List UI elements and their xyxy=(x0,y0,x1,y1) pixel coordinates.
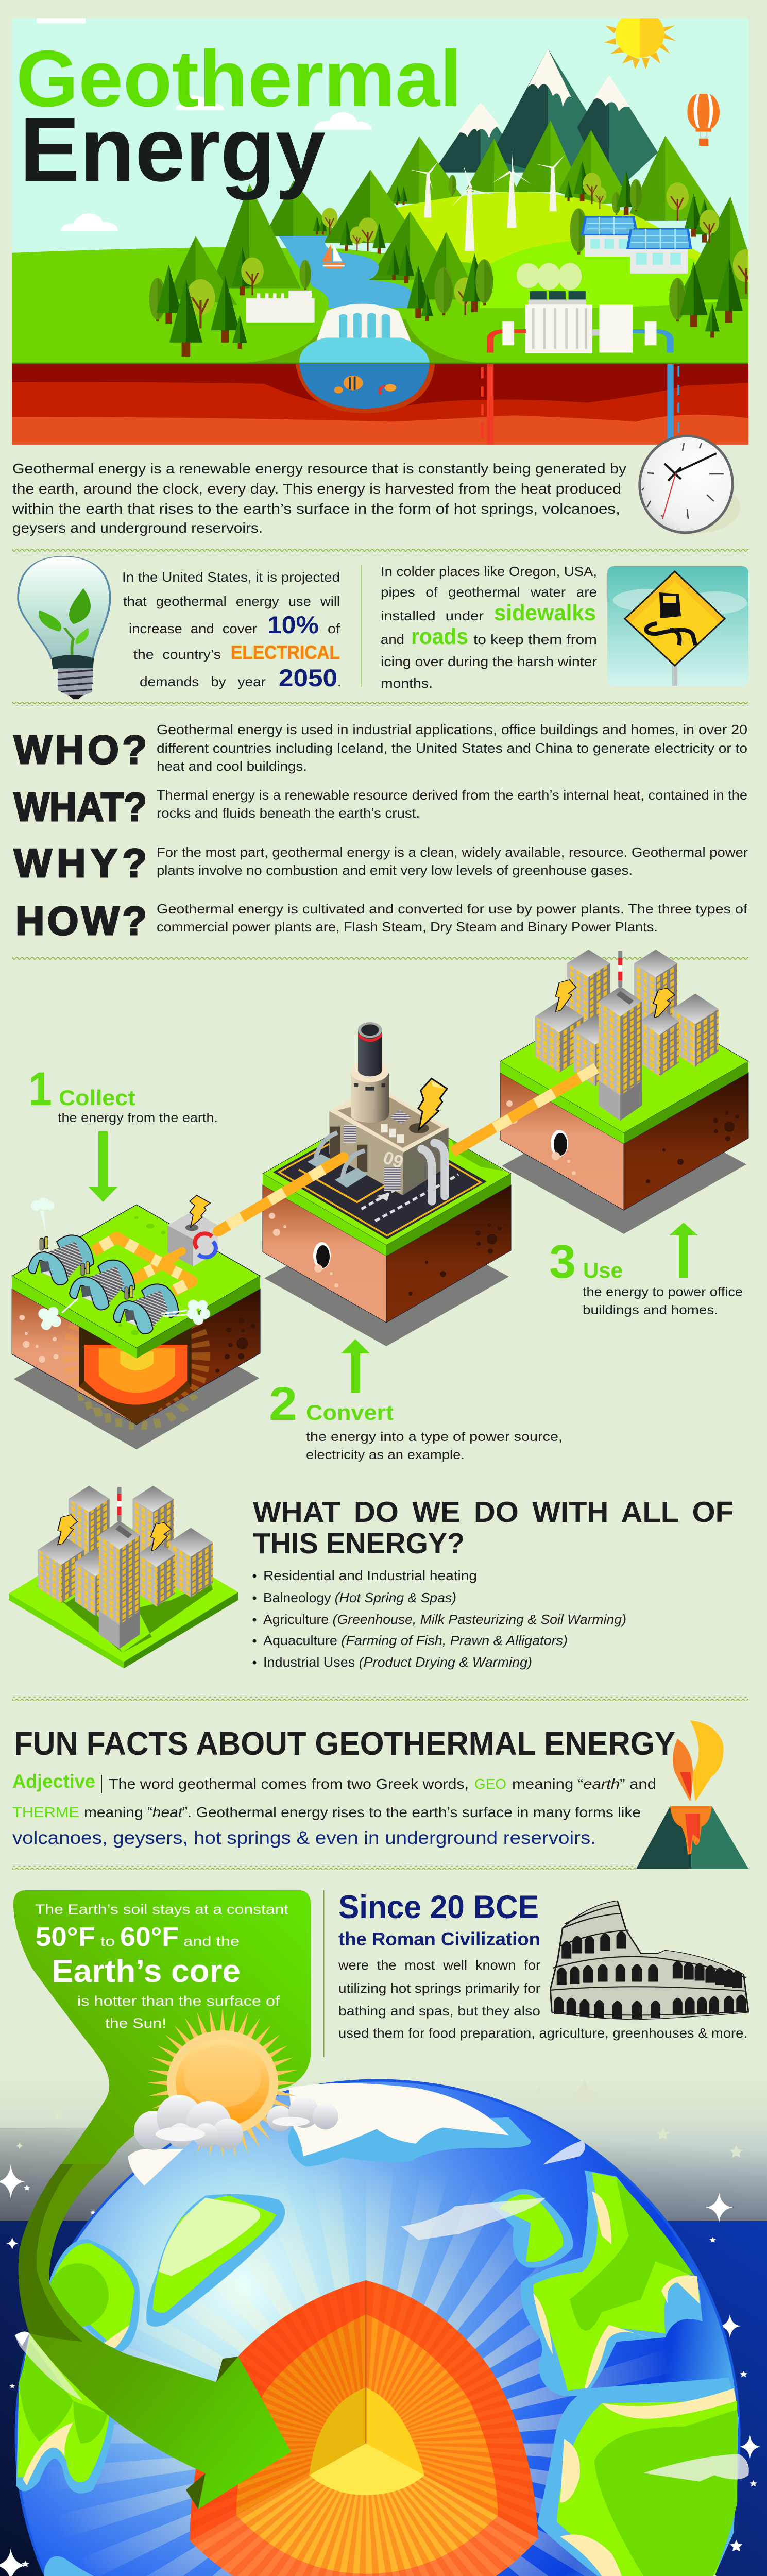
panel text: soil and core temperature: is hotter than the surface of xyxy=(77,1993,280,2009)
icon: sun with rays xyxy=(147,2008,298,2158)
text: heated sidewalks and roads: months. xyxy=(381,675,433,691)
panel text: soil and core temperature: The Earth’s soil stays at a constant xyxy=(35,1902,289,1917)
text: heated sidewalks and roads: and xyxy=(381,632,404,647)
step 1 switch box xyxy=(167,1195,218,1266)
how xyxy=(15,898,748,943)
roman civilization text: were the most well known for xyxy=(338,1957,540,1973)
underground rock layers xyxy=(12,364,748,445)
title xyxy=(16,34,462,200)
text: heated sidewalks and roads: pipes of geothermal water are xyxy=(381,584,597,600)
text: projected electrical demand: 10% xyxy=(267,611,319,638)
list of uses xyxy=(252,1568,626,1670)
who: heat and cool buildings. xyxy=(157,758,307,774)
panel text: soil and core temperature: 60°F xyxy=(120,1922,179,1952)
continent: north pale land xyxy=(146,2194,285,2327)
panel text: soil and core temperature: to xyxy=(100,1934,115,1949)
hydro dam xyxy=(242,304,482,363)
step 3 label: buildings and homes. xyxy=(583,1303,718,1317)
step 3 label: Use xyxy=(583,1258,623,1282)
why xyxy=(14,840,748,886)
icon: hot-air balloon xyxy=(687,94,720,146)
title: Energy xyxy=(20,98,326,200)
text: projected electrical demand xyxy=(122,569,341,691)
continent: north-east island xyxy=(489,2189,573,2268)
asphalt and factory xyxy=(218,1022,505,1239)
title: Geothermal xyxy=(16,34,462,123)
fun facts paragraph: meaning “ earth ” and xyxy=(512,1776,656,1792)
earth core cutaway xyxy=(190,2280,538,2576)
underground reservoir and fish xyxy=(296,363,435,413)
fun facts paragraph xyxy=(12,1771,656,1848)
icon: sun xyxy=(604,18,676,69)
fun facts paragraph: Adjective xyxy=(12,1771,95,1792)
step 2 label: Convert xyxy=(306,1400,394,1425)
who what why how xyxy=(14,722,748,943)
turbines xyxy=(28,1235,179,1334)
geothermal heat pit xyxy=(79,1326,192,1425)
fun facts paragraph: THERME xyxy=(12,1804,79,1820)
why: plants involve no combustion and emit very low levels of greenhouse gases. xyxy=(157,862,633,878)
why: For the most part, geothermal energy is a clean, widely available, resource. Geothermal power xyxy=(157,844,748,860)
northern ice cap xyxy=(128,2083,585,2186)
icon: light bulb with plant xyxy=(18,556,110,699)
intro paragraph: within the earth that rises to the earth’s surface in the form of hot springs, volcanoes, xyxy=(12,501,620,517)
step 2 label xyxy=(269,1378,563,1462)
hero illustration: geothermal landscape xyxy=(12,10,763,445)
text: projected electrical demand: ELECTRICAL xyxy=(231,642,340,663)
step 2 label: electricity as an example. xyxy=(306,1448,465,1462)
arrow: use xyxy=(669,1223,698,1278)
text: projected electrical demand: increase and cover xyxy=(129,621,257,636)
text: projected electrical demand: In the United States, it is projected xyxy=(122,569,340,585)
step 3 label xyxy=(549,1235,743,1317)
step 1 label: Collect xyxy=(59,1086,135,1110)
what xyxy=(14,784,747,829)
icon: volcano xyxy=(636,1720,748,1869)
panel text: soil and core temperature: 50°F xyxy=(36,1922,95,1952)
list of uses: Industrial Uses (Product Drying & Warming) xyxy=(263,1654,532,1670)
hills xyxy=(12,170,763,363)
energy beam to city xyxy=(452,1068,596,1152)
text: projected electrical demand: of xyxy=(328,621,340,636)
pale stars on upper fade xyxy=(15,2078,743,2158)
wind turbines xyxy=(410,150,565,251)
what: WHAT? xyxy=(14,784,147,829)
geothermal pipes below ground xyxy=(482,364,678,445)
stars xyxy=(0,2165,761,2576)
solar houses xyxy=(582,217,691,274)
step 1 label: the energy from the earth. xyxy=(58,1111,218,1125)
icon: colosseum sketch xyxy=(550,1901,748,2020)
continent: south-west land xyxy=(44,2556,311,2576)
fun facts paragraph: GEO xyxy=(474,1776,506,1792)
who: Geothermal energy is used in industrial applications, office buildings and homes, in over 20 xyxy=(157,722,747,737)
who xyxy=(14,722,747,774)
step 1 label: 1 xyxy=(28,1063,52,1115)
step 2 label: the energy into a type of power source, xyxy=(306,1430,563,1444)
text: heated sidewalks and roads: roads xyxy=(411,624,468,649)
why: WHY? xyxy=(14,840,147,886)
green arrow into core xyxy=(19,2164,291,2509)
step 2 label: 2 xyxy=(269,1378,297,1430)
text: projected electrical demand: . xyxy=(337,674,341,689)
roman civilization text: utilizing hot springs primarily for xyxy=(338,1980,540,1996)
roman civilization text: used them for food preparation, agriculture, greenhouses & more. xyxy=(338,2025,747,2041)
roman civilization heading: Since 20 BCE xyxy=(338,1889,539,1925)
text: projected electrical demand: demands by year xyxy=(140,674,266,689)
heading: what do we do: THIS ENERGY? xyxy=(253,1527,465,1560)
continent: north-east land xyxy=(521,2170,703,2396)
step 3 label: the energy to power office xyxy=(583,1285,743,1299)
text: projected electrical demand: 2050 xyxy=(279,664,337,691)
core rays and continents xyxy=(14,2164,749,2576)
trees xyxy=(149,161,759,357)
continent: east land xyxy=(537,2378,739,2576)
how: commercial power plants are, Flash Steam, Dry Steam and Binary Power Plants. xyxy=(157,919,658,935)
text: heated sidewalks and roads: to keep them from xyxy=(473,632,597,647)
roman civilization text: bathing and spas, but they also xyxy=(338,2003,540,2019)
ocean xyxy=(16,2080,739,2576)
heading: what do we do xyxy=(253,1496,734,1560)
text: heated sidewalks and roads: icing over during the harsh winter xyxy=(381,654,597,669)
list of uses: Aquaculture (Farming of Fish, Prawn & Alligators) xyxy=(263,1633,568,1648)
green mountains xyxy=(264,120,722,236)
panel text: soil and core temperature: and the xyxy=(183,1934,240,1949)
intro paragraph: geysers and underground reservoirs. xyxy=(12,520,263,536)
roman civilization heading xyxy=(338,1889,540,1950)
heading: what do we do: WHAT DO WE DO WITH ALL OF xyxy=(253,1496,734,1529)
how: HOW? xyxy=(15,898,147,943)
sailboat xyxy=(322,244,345,268)
back mountains with snow xyxy=(439,48,658,187)
heading: fun facts: FUN FACTS ABOUT GEOTHERMAL ENERGY xyxy=(14,1725,675,1762)
text: heated sidewalks and roads: sidewalks xyxy=(494,600,596,625)
text: heated sidewalks and roads xyxy=(381,564,597,691)
list of uses: Balneology (Hot Spring & Spas) xyxy=(263,1590,456,1605)
asphalt and factory: 09 xyxy=(381,1147,406,1173)
text: heated sidewalks and roads: installed under xyxy=(381,608,484,623)
green fact panel xyxy=(13,1890,311,2164)
who: WHO? xyxy=(14,727,147,772)
geothermal plant xyxy=(490,263,670,353)
list of uses: Agriculture (Greenhouse, Milk Pasteurizing & Soil Warming) xyxy=(263,1612,626,1627)
step 2 isometric block: convert xyxy=(218,1022,511,1346)
arrow: convert xyxy=(341,1339,370,1393)
step 1 label xyxy=(28,1063,218,1125)
icon: clouds xyxy=(134,2095,338,2150)
how: Geothermal energy is cultivated and converted for use by power plants. The three types of xyxy=(157,901,748,917)
translucent clouds xyxy=(14,2198,749,2576)
intro paragraph: Geothermal energy is a renewable energy resource that is constantly being generated by xyxy=(12,461,626,477)
step 3 label: 3 xyxy=(549,1235,576,1288)
steam puffs xyxy=(31,1198,210,1330)
small power station xyxy=(246,291,315,323)
intro paragraph xyxy=(12,461,626,536)
text: heated sidewalks and roads: In colder places like Oregon, USA, xyxy=(381,564,597,579)
fun facts paragraph: volcanoes, geysers, hot springs & even in underground reservoirs. xyxy=(12,1828,596,1848)
city illustration xyxy=(9,1486,238,1668)
road sign panel xyxy=(607,566,748,686)
continent: west land xyxy=(16,2325,130,2494)
step 1 isometric block: collect xyxy=(12,1195,260,1449)
steam gauges xyxy=(308,1132,367,1188)
river xyxy=(279,236,411,308)
energy pipe on ground xyxy=(94,1238,192,1292)
globe xyxy=(14,2080,749,2576)
lower sky background xyxy=(0,2075,767,2576)
what: rocks and fluids beneath the earth’s crust. xyxy=(157,805,420,821)
icon: wall clock xyxy=(630,427,742,541)
intro paragraph: the earth, around the clock, every day. This energy is harvested from the heat produced xyxy=(12,481,621,497)
roman civilization heading: the Roman Civilization xyxy=(338,1928,540,1950)
fun facts paragraph: The word geothermal comes from two Greek words, xyxy=(109,1776,469,1792)
who: different countries including Iceland, the United States and China to generate electricity or to xyxy=(157,740,747,756)
fun facts paragraph: meaning “ heat”. Geothermal energy rises to the earth’s surface in many forms like xyxy=(84,1804,641,1820)
step 3 isometric block with city xyxy=(500,950,748,1234)
what: Thermal energy is a renewable resource derived from the earth’s internal heat, contained in the xyxy=(157,787,747,803)
text: projected electrical demand: that geothermal energy use will xyxy=(123,594,340,609)
text: projected electrical demand: the country’s xyxy=(133,647,221,662)
panel text: soil and core temperature xyxy=(35,1902,289,2031)
continent: west upper land xyxy=(48,2239,140,2354)
panel text: soil and core temperature: Earth’s core xyxy=(52,1954,241,1989)
arrow: collect xyxy=(89,1131,117,1202)
list of uses: Residential and Industrial heating xyxy=(263,1568,477,1583)
panel text: soil and core temperature: the Sun! xyxy=(105,2015,166,2031)
energy beam xyxy=(218,1158,344,1231)
roman civilization text xyxy=(338,1957,747,2041)
